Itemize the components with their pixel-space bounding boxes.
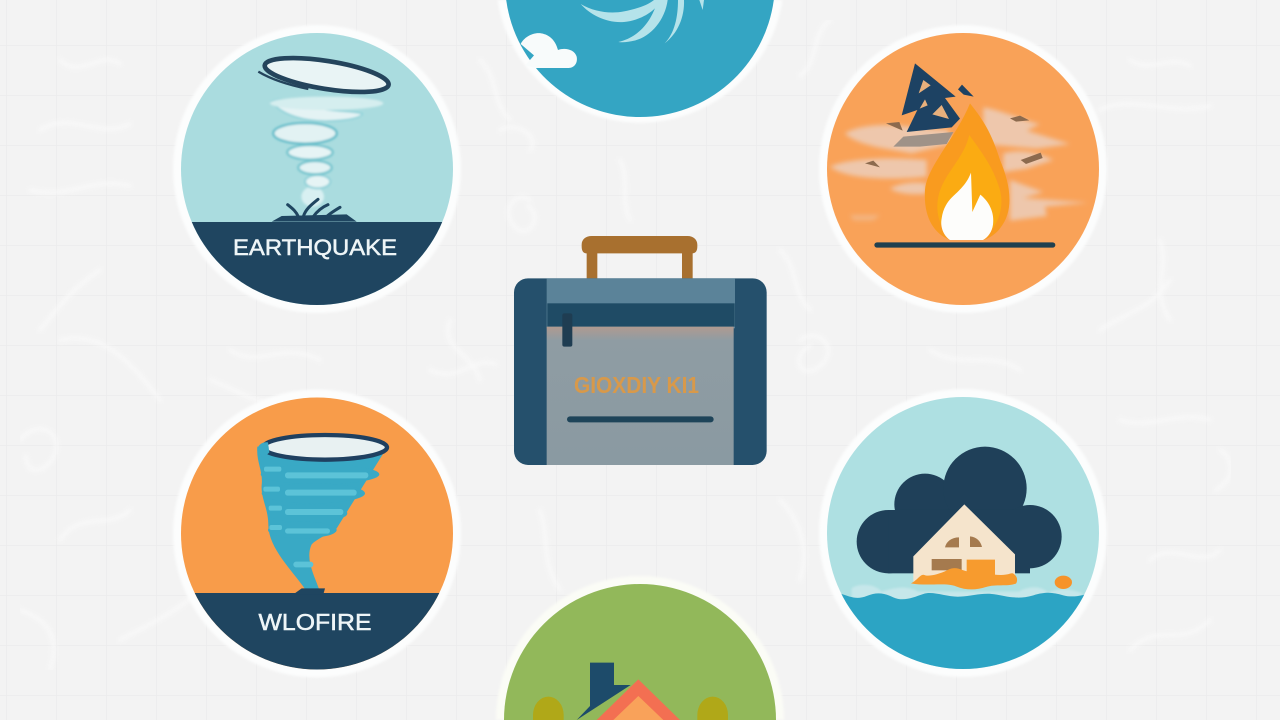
- icon: flood water: [840, 585, 1093, 672]
- icon: flooded house: [911, 504, 1072, 589]
- mountain fragment: [902, 63, 960, 132]
- bag body: [514, 278, 767, 465]
- icon: small cloud: [521, 33, 577, 68]
- panel: house badge (cropped at bottom): [496, 576, 784, 720]
- icon: tornado funnel: [257, 435, 387, 594]
- icon: house with chimney and bushes: [533, 663, 728, 720]
- panel: emergency kit bag: [514, 236, 767, 465]
- kit label: GIOXDIY KI1: [574, 372, 699, 398]
- panel: earthquake badge: [170, 25, 470, 313]
- panel: hurricane badge (cropped at top): [498, 0, 782, 123]
- icon: tornado over ground: [258, 51, 391, 222]
- label: EARTHQUAKE: EARTHQUAKE: [233, 235, 397, 260]
- icon: bag handle: [582, 236, 697, 280]
- icon: hurricane swirl: [581, 0, 704, 43]
- icon: flame with debris: [830, 63, 1088, 248]
- label: WLOFIRE: WLOFIRE: [258, 609, 372, 635]
- panel: flood badge: [819, 389, 1107, 677]
- icon: storm cloud: [857, 447, 1062, 573]
- ground band: [194, 593, 440, 670]
- ground band: [192, 222, 442, 305]
- panel: wildfire flame badge: [819, 25, 1107, 313]
- panel: tornado badge labelled wildfire: [170, 390, 470, 683]
- flame core: [941, 173, 993, 240]
